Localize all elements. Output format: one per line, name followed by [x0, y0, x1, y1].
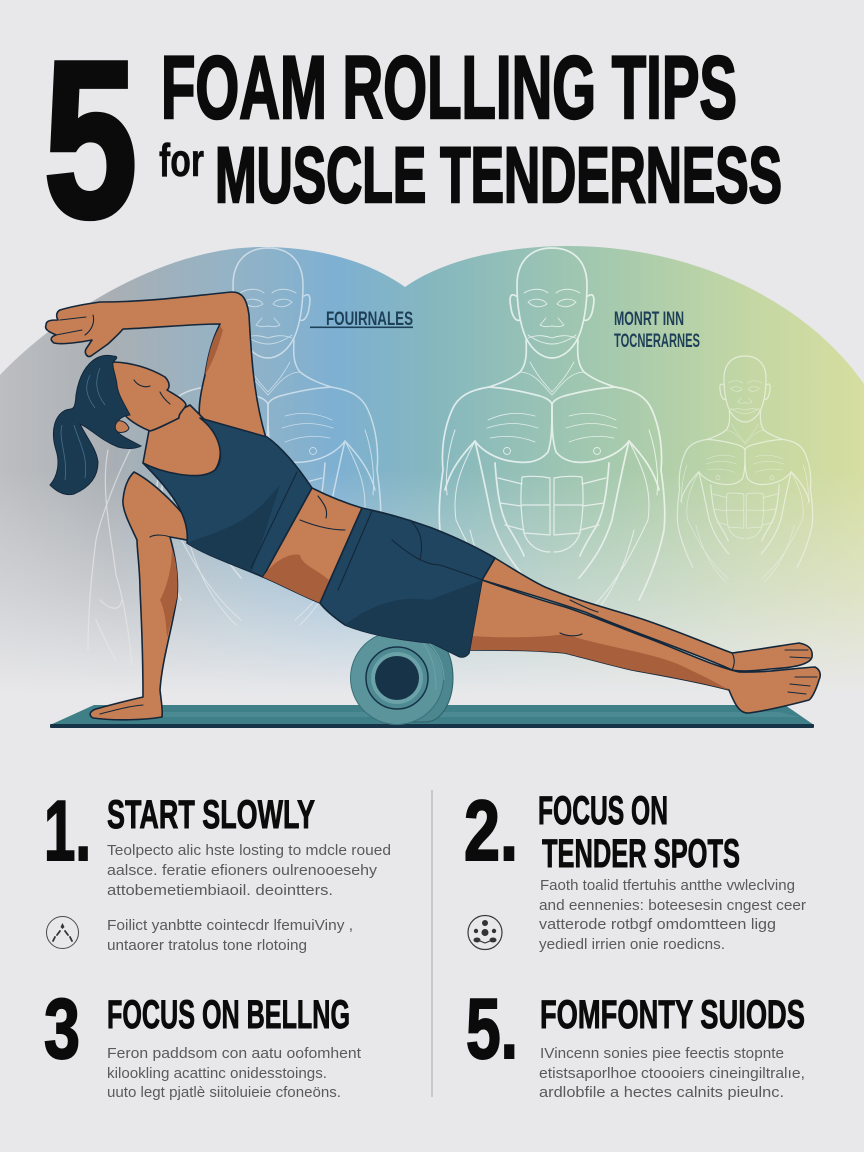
body text: ardlobfile a hectes calnits pieulnc. — [539, 1084, 784, 1101]
anatomy figure: far left faint arm — [88, 450, 132, 665]
number 5: 5. — [466, 982, 518, 1077]
neck and chest — [143, 405, 220, 476]
divider between columns — [432, 790, 433, 1097]
body text: aalsce. feratie efioners oulrenooesehy — [107, 862, 378, 879]
note text — [107, 917, 353, 954]
body text: Teolpecto alic hste losting to mdcle roued — [107, 842, 391, 859]
abdomen — [263, 488, 362, 603]
label: mount on tenderness: TOCNERARNES — [614, 331, 700, 352]
heading: TENDER SPOTS — [542, 832, 740, 876]
body text — [539, 1045, 805, 1101]
hair and ponytail — [50, 355, 141, 495]
heading: FOCUS ON — [538, 789, 668, 833]
body text: yediedl irrien onie roedicns. — [539, 936, 725, 953]
note text: untaorer tratolus tone rlotoing — [107, 937, 307, 954]
body text: IVincenn sonies piee feectis stopnte — [540, 1045, 784, 1062]
anatomy figure: centre large — [439, 248, 665, 625]
body text: and eennenies: boteesesin cngest ceer — [539, 897, 806, 914]
label: mount on tenderness — [614, 309, 700, 352]
anatomy figure: left behind woman — [155, 248, 381, 625]
number 3: 3 — [44, 982, 80, 1077]
tip 2: focus on tender spots — [464, 784, 806, 953]
icon: circle with dotted arch — [46, 916, 78, 948]
body text — [539, 877, 806, 953]
gradient double arch background — [0, 246, 864, 700]
body text: Feron paddsom con aatu oofomhent — [107, 1045, 362, 1062]
crop top — [143, 418, 312, 577]
soft fade to page background — [0, 460, 864, 702]
head — [112, 362, 186, 432]
front leg — [469, 580, 820, 713]
body text: etistsaporlhoe ctoooiers cineingiltralıe, — [539, 1065, 805, 1082]
body text: Faoth toalid tfertuhis antthe vwleclving — [540, 877, 795, 894]
hero illustration panel — [0, 246, 864, 728]
label: fourth names: FOUIRNALES — [326, 309, 413, 330]
back leg — [482, 558, 812, 671]
anatomy figure: right small — [677, 356, 813, 582]
note text: Foilict yanbtte cointecdr lfemuiViny , — [107, 917, 353, 934]
tip 5: comfort speeds — [466, 982, 805, 1101]
body text — [107, 1045, 362, 1101]
body text — [107, 842, 391, 899]
heading: FOCUS ON BELLNG — [107, 993, 350, 1037]
heading — [538, 789, 740, 876]
label: mount on tenderness: MONRT INN — [614, 309, 684, 330]
support arm — [90, 472, 192, 720]
woman foam rolling — [46, 292, 820, 720]
body text: vatterode rotbgf omdomtteen ligg — [539, 916, 776, 933]
number 1: 1. — [44, 784, 91, 879]
body text: kilookling acattinc onidesstoings. — [107, 1065, 327, 1082]
shorts — [320, 508, 495, 657]
tip 3: focus on belling — [44, 982, 362, 1101]
number 2: 2. — [464, 784, 518, 879]
body text: attobemetiembiaoil. deointters. — [107, 882, 333, 899]
label: fourth names — [310, 309, 413, 330]
title numeral 5: 5 — [44, 16, 137, 264]
body text: uuto legt pjatlè siitoluieie cfoneöns. — [107, 1084, 341, 1101]
exercise mat — [50, 705, 814, 728]
title — [44, 16, 782, 264]
title word for: for — [159, 134, 204, 186]
raised arm — [46, 292, 266, 438]
heading: START SLOWLY — [107, 793, 315, 837]
tip 1: start slowly — [44, 784, 391, 954]
foam roller — [350, 632, 453, 724]
icon: circle with pressure points — [468, 916, 502, 950]
